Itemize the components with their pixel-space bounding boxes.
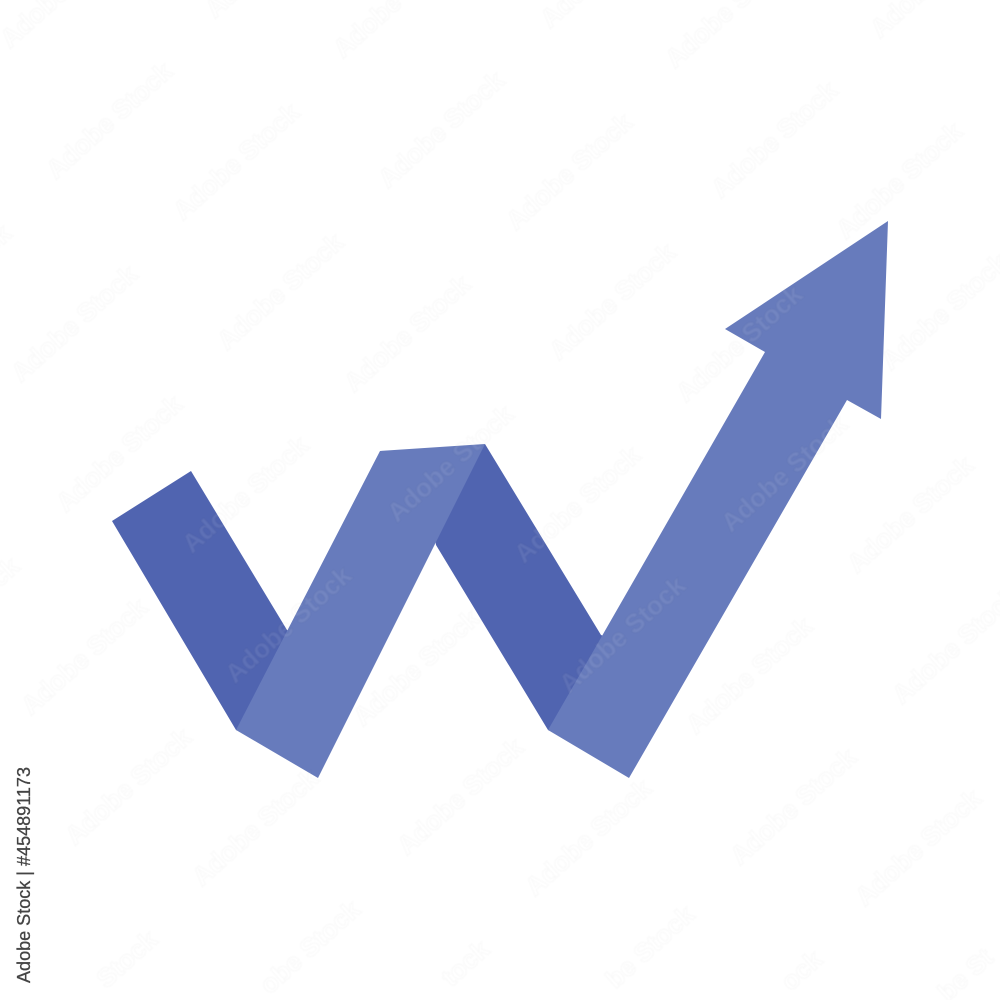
stock watermark pattern: Adobe Stock <box>391 732 529 861</box>
stock watermark pattern: Adobe Stock <box>219 560 357 689</box>
zigzag arrow <box>112 221 888 778</box>
stock watermark pattern: Adobe Stock <box>5 259 143 388</box>
stock watermark pattern: Adobe Stock <box>211 227 349 356</box>
second light ribbon segment <box>236 444 485 778</box>
stock watermark pattern: Adobe Stock <box>15 592 153 721</box>
stock watermark pattern: Adobe Stock <box>50 389 188 518</box>
first dark ribbon segment <box>112 471 300 735</box>
stock watermark pattern: Adobe Stock <box>347 603 485 732</box>
stock watermark pattern: Adobe Stock <box>519 773 657 902</box>
stock watermark pattern: Adobe Stock <box>680 611 818 740</box>
stock watermark pattern: Adobe Stock <box>186 763 324 892</box>
stock watermark pattern: Adobe Stock <box>705 75 843 204</box>
third dark ribbon segment <box>430 444 615 735</box>
stock watermark pattern: obe Stock <box>254 894 366 1000</box>
stock watermark pattern: Adobe Stock <box>59 722 197 851</box>
stock watermark pattern: Adobe Stock <box>167 97 305 226</box>
arrow shaft and head <box>548 221 888 778</box>
stock watermark pattern: Adobe Stock <box>372 65 510 194</box>
stock watermark pattern: Adobe Stock <box>670 279 808 408</box>
stock watermark pattern: tock <box>435 934 495 992</box>
stock watermark pattern: Adobe Stock <box>40 56 178 185</box>
stock watermark pattern: Adobe Stock <box>381 399 519 528</box>
stock watermark pattern: Adobe Stock <box>830 116 968 245</box>
stock watermark pattern: Adobe Stock <box>543 237 681 366</box>
stock watermark pattern: Adobe Stock <box>338 269 476 398</box>
stock watermark pattern: ock <box>775 944 828 996</box>
stock watermark pattern: be Stock <box>599 899 700 994</box>
stock watermark pattern: Adobe Stock <box>500 107 638 236</box>
stock watermark pattern: Adobe Stock <box>715 409 853 538</box>
stock watermark pattern: Adobe Stock <box>176 430 314 559</box>
stock watermark pattern: Adobe Stock <box>508 440 646 569</box>
stock credit label: Adobe Stock | #454891173 <box>14 767 34 983</box>
stock watermark pattern: Adobe Stock <box>849 783 987 912</box>
stock watermark pattern: Adobe Stock <box>841 450 979 579</box>
stock watermark pattern: Adobe Stock <box>724 742 862 871</box>
stock watermark pattern: Adobe Stock <box>553 570 691 699</box>
stock watermark pattern: Stock <box>90 924 163 994</box>
